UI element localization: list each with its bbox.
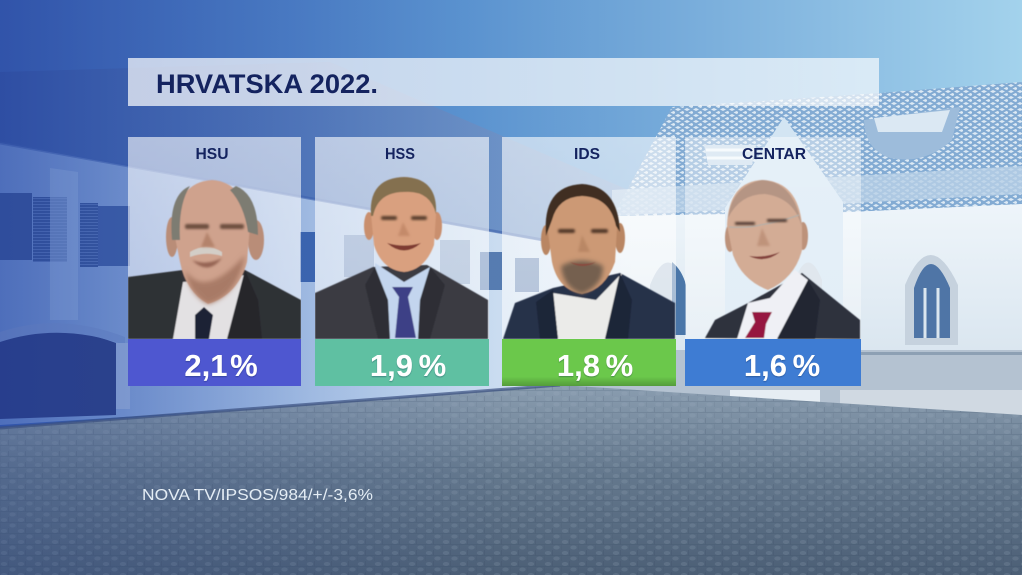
value HSS: 1,9 % (370, 348, 446, 383)
value bar IDS (502, 339, 676, 386)
value bar HSU (128, 339, 301, 386)
party label IDS: IDS (574, 146, 600, 163)
portrait CENTAR (705, 180, 860, 339)
panel: HSS (315, 137, 489, 386)
church gable (725, 117, 843, 345)
panel: HSU (128, 137, 301, 386)
value CENTAR: 1,6 % (744, 348, 820, 383)
left building cornice (0, 143, 560, 243)
portrait IDS (503, 184, 675, 339)
panel: IDS (502, 137, 676, 386)
party label CENTAR: CENTAR (742, 146, 806, 163)
church window left (650, 262, 686, 335)
panel: CENTAR (685, 137, 861, 386)
value bar CENTAR (685, 339, 861, 386)
church window centre (795, 262, 822, 330)
title banner (128, 58, 879, 106)
church plinth (550, 350, 1022, 415)
church coats of arms (704, 107, 960, 165)
church roof ornamental band (612, 166, 1022, 216)
left building facade (0, 143, 625, 425)
church wall (612, 204, 1022, 392)
left building roof (0, 62, 640, 255)
party label HSU: HSU (196, 146, 228, 163)
portrait HSS (315, 177, 488, 339)
left building windows (0, 168, 539, 320)
value bar HSS (315, 339, 489, 386)
value IDS: 1,8 % (557, 348, 633, 383)
church window right (905, 255, 958, 345)
value HSU: 2,1 % (184, 348, 258, 383)
source line: NOVA TV/IPSOS/984/+/-3,6% (142, 487, 373, 504)
portrait HSU (128, 180, 301, 339)
party label HSS: HSS (385, 146, 415, 163)
left building gateway arch (0, 331, 116, 419)
cobblestone square (0, 385, 1022, 575)
title text: HRVATSKA 2022. (156, 69, 378, 99)
blue colour wash (0, 0, 1022, 430)
church roof (612, 82, 1022, 218)
